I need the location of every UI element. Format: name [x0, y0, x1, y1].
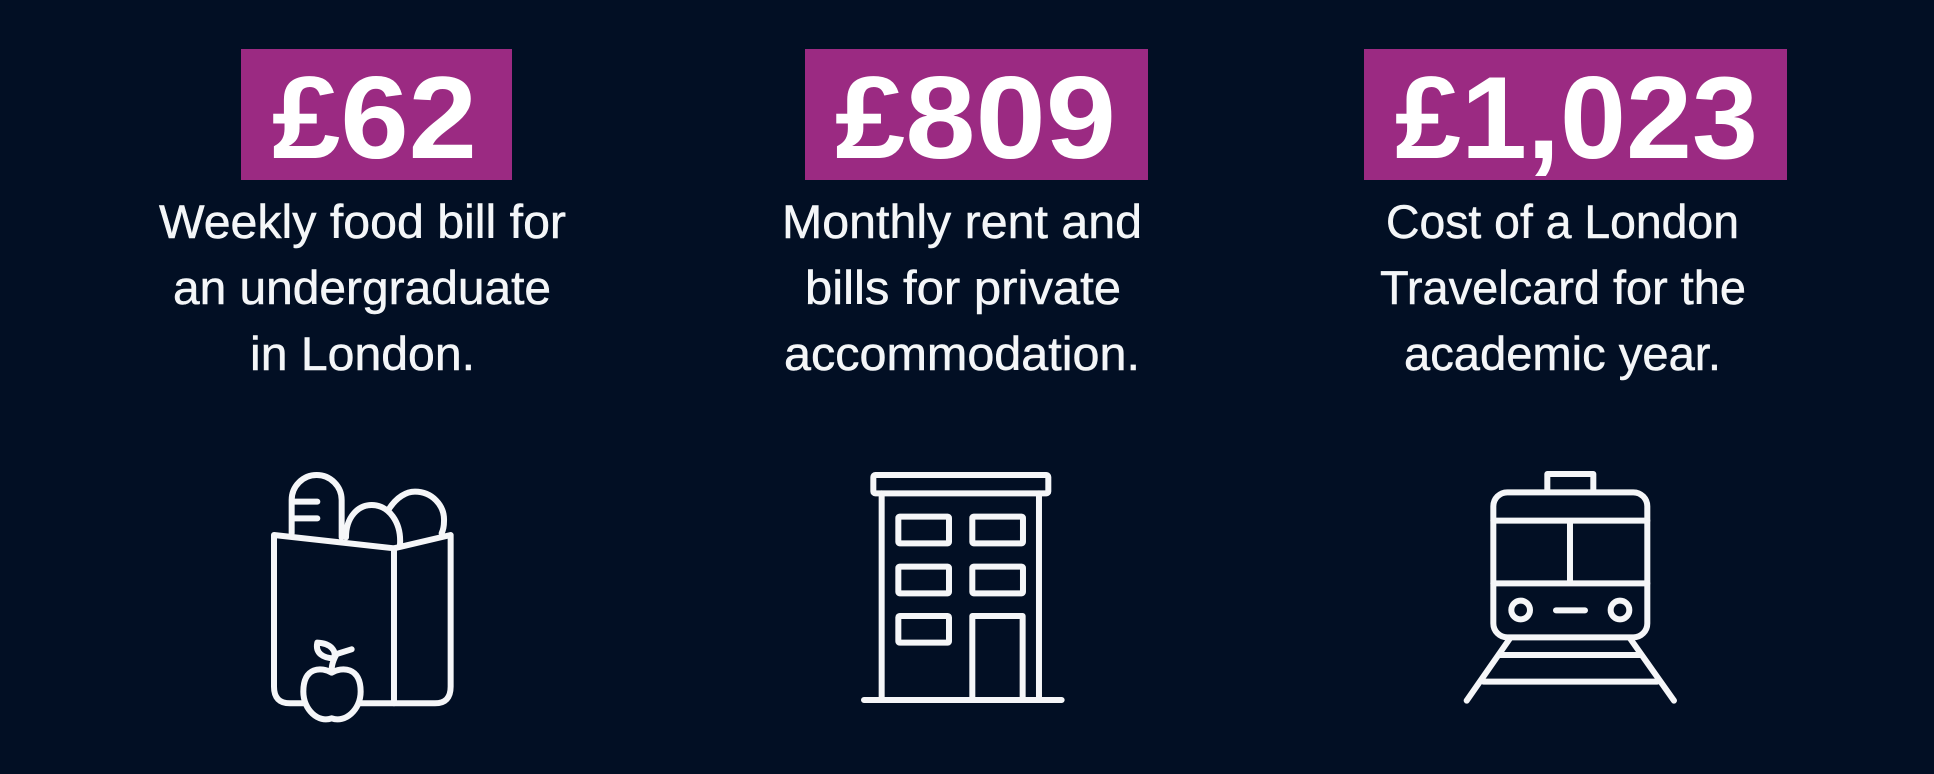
text: food description: in London. — [250, 327, 475, 380]
icon: apartment building — [864, 475, 1062, 700]
text: travel description: Cost of a London — [1386, 195, 1739, 248]
figure: £809: £809 — [835, 52, 1116, 183]
panel: rent — [782, 49, 1148, 700]
text: rent description — [782, 195, 1142, 380]
text: rent description: accommodation. — [784, 327, 1140, 380]
panel: food — [159, 49, 566, 719]
text: travel description: academic year. — [1404, 327, 1721, 380]
figure: £62: £62 — [272, 52, 477, 183]
text: food description — [159, 195, 566, 380]
text: food description: an undergraduate — [173, 261, 551, 314]
text: rent description: bills for private — [805, 261, 1121, 314]
text: travel description — [1380, 195, 1746, 380]
panel: travel — [1364, 49, 1787, 701]
text: rent description: Monthly rent and — [782, 195, 1142, 248]
text: food description: Weekly food bill for — [159, 195, 566, 248]
text: travel description: Travelcard for the — [1380, 261, 1746, 314]
figure: £1,023: £1,023 — [1395, 52, 1758, 183]
icon: train — [1467, 474, 1674, 701]
icon: grocery bag — [274, 475, 451, 719]
